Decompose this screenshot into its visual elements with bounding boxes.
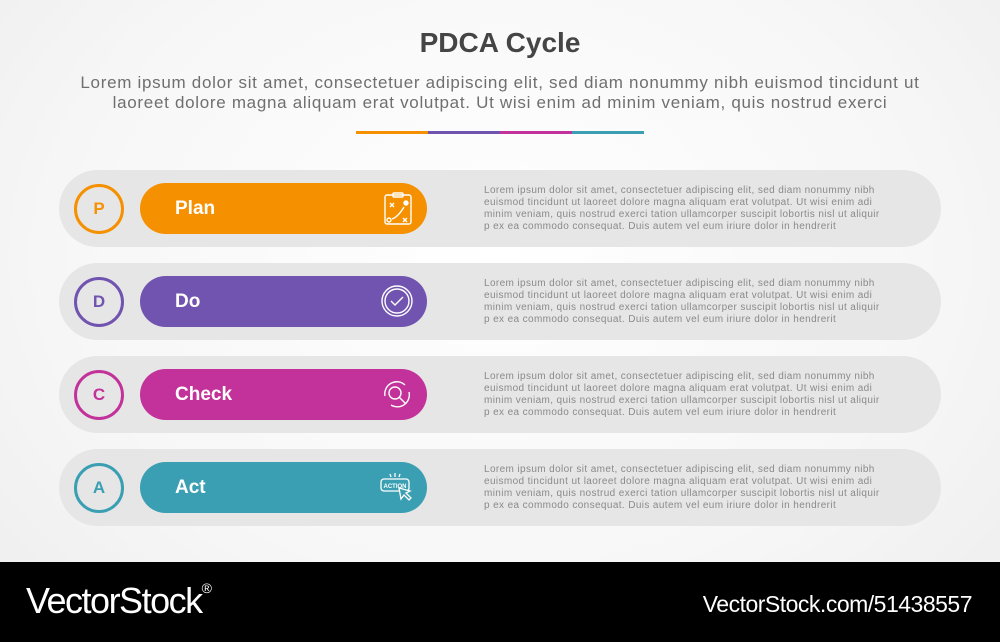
- circle D: D: [93, 292, 105, 311]
- pill Plan: [140, 183, 427, 234]
- text: p ex ea commodo consequat. Duis autem vel eum iriure dolor in hendrerit: [484, 314, 836, 325]
- footer url: VectorStock.com/51438557: [703, 591, 972, 617]
- pill Check: Check: [175, 384, 232, 405]
- row: plan: [59, 170, 941, 247]
- icon: action button: [380, 473, 412, 501]
- text: minim veniam, quis nostrud exerci tation ullamcorper suscipit lobortis nisl ut aliquir: [484, 302, 880, 313]
- circle D: [74, 277, 124, 327]
- icon: clipboard: [384, 192, 412, 225]
- row: act: [59, 449, 941, 526]
- pill Act: Act: [175, 477, 206, 498]
- text: euismod tincidunt ut laoreet dolore magna aliquam erat volutpat. Ut wisi enim adi: [484, 476, 872, 487]
- icon: check: [381, 285, 413, 317]
- pill Check: [140, 369, 427, 420]
- text: minim veniam, quis nostrud exerci tation ullamcorper suscipit lobortis nisl ut aliquir: [484, 488, 880, 499]
- pill Act: [140, 462, 427, 513]
- color divider: [356, 131, 644, 134]
- icon: action button: ACTION: [384, 484, 406, 490]
- circle C: [74, 370, 124, 420]
- text: [484, 185, 880, 232]
- text: p ex ea commodo consequat. Duis autem vel eum iriure dolor in hendrerit: [484, 500, 836, 511]
- pill Plan: Plan: [175, 198, 215, 219]
- icon: magnifier: [384, 381, 410, 408]
- subtitle: laoreet dolore magna aliquam erat volutpat. Ut wisi enim ad minim veniam, quis nostrud exerci: [113, 93, 887, 112]
- text: minim veniam, quis nostrud exerci tation ullamcorper suscipit lobortis nisl ut aliquir: [484, 395, 880, 406]
- row: check: [59, 356, 941, 433]
- text: Lorem ipsum dolor sit amet, consectetuer adipiscing elit, sed diam nonummy nibh: [484, 464, 875, 475]
- footer bar: [0, 562, 1000, 642]
- text: euismod tincidunt ut laoreet dolore magna aliquam erat volutpat. Ut wisi enim adi: [484, 290, 872, 301]
- pill Do: Do: [175, 291, 200, 312]
- title: PDCA Cycle: [420, 27, 580, 58]
- text: Lorem ipsum dolor sit amet, consectetuer adipiscing elit, sed diam nonummy nibh: [484, 185, 875, 196]
- text: euismod tincidunt ut laoreet dolore magna aliquam erat volutpat. Ut wisi enim adi: [484, 197, 872, 208]
- circle P: P: [93, 199, 105, 218]
- circle A: [74, 463, 124, 513]
- pill Do: [140, 276, 427, 327]
- text: [484, 464, 880, 511]
- text: [484, 371, 880, 418]
- text: Lorem ipsum dolor sit amet, consectetuer adipiscing elit, sed diam nonummy nibh: [484, 371, 875, 382]
- row: do: [59, 263, 941, 340]
- text: euismod tincidunt ut laoreet dolore magna aliquam erat volutpat. Ut wisi enim adi: [484, 383, 872, 394]
- footer logo: VectorStock®: [26, 580, 210, 621]
- text: minim veniam, quis nostrud exerci tation ullamcorper suscipit lobortis nisl ut aliquir: [484, 209, 880, 220]
- subtitle: Lorem ipsum dolor sit amet, consectetuer adipiscing elit, sed diam nonummy nibh euismod tincidunt ut: [80, 73, 920, 92]
- subtitle: [80, 73, 920, 112]
- text: Lorem ipsum dolor sit amet, consectetuer adipiscing elit, sed diam nonummy nibh: [484, 278, 875, 289]
- circle C: C: [93, 385, 105, 404]
- text: [484, 278, 880, 325]
- circle P: [74, 184, 124, 234]
- circle A: A: [93, 478, 105, 497]
- text: p ex ea commodo consequat. Duis autem vel eum iriure dolor in hendrerit: [484, 407, 836, 418]
- text: p ex ea commodo consequat. Duis autem vel eum iriure dolor in hendrerit: [484, 221, 836, 232]
